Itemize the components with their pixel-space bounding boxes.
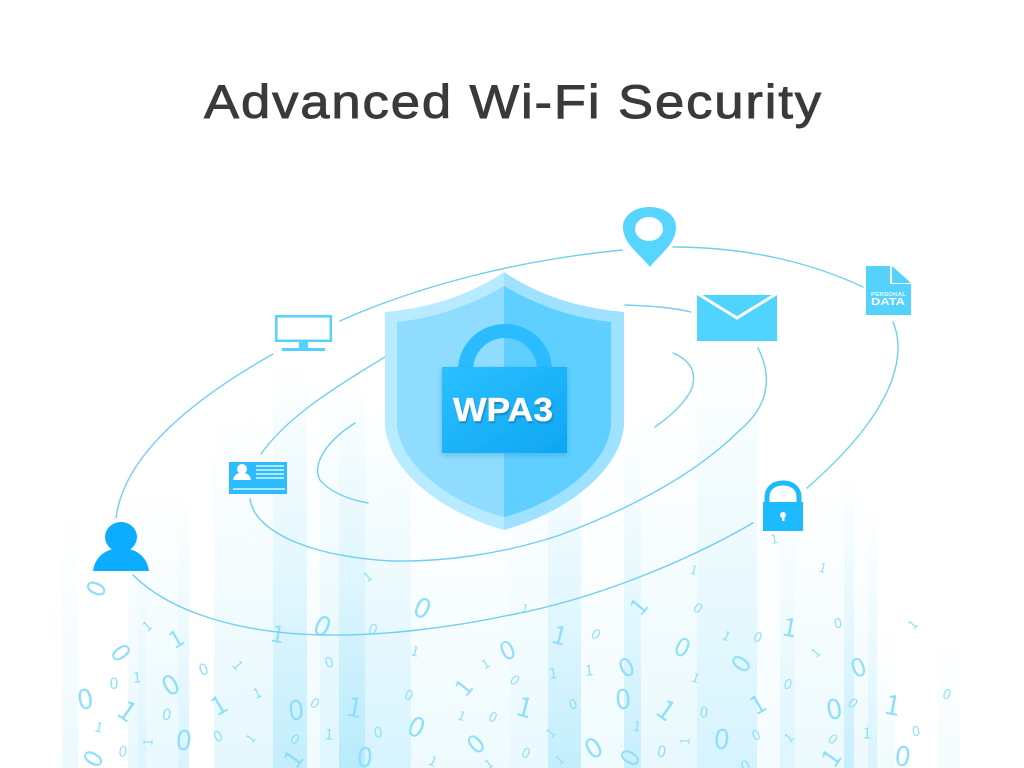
binary digits: 1 — [863, 722, 871, 744]
binary digits: 1 — [541, 723, 559, 741]
binary digits: 0 — [587, 624, 605, 645]
binary digits: 0 — [493, 629, 521, 669]
binary digits: 1 — [689, 667, 703, 687]
icon: personal data document: PERSONAL — [871, 292, 907, 298]
binary digits: 1 — [817, 557, 829, 577]
binary digits: 0 — [669, 626, 697, 666]
icon: personal data document — [866, 266, 911, 315]
binary digits: 0 — [195, 655, 211, 681]
binary digits: 0 — [110, 670, 119, 694]
binary digits: 0 — [699, 701, 709, 723]
binary digits: 0 — [750, 626, 766, 648]
binary digits: 1 — [324, 723, 334, 745]
binary digits: 1 — [619, 589, 655, 621]
binary digits: 0 — [748, 724, 764, 746]
binary digits: 0 — [372, 721, 384, 743]
binary digits: 0 — [612, 646, 640, 686]
icon: ID card — [229, 462, 287, 494]
binary digits: 0 — [506, 670, 525, 690]
icon: small padlock — [763, 483, 803, 531]
binary digits: 1 — [202, 684, 234, 724]
binary digits: 0 — [402, 684, 416, 706]
binary digits: 0 — [910, 720, 922, 742]
binary digits: 1 — [132, 666, 142, 688]
binary digits: 1 — [268, 614, 288, 650]
binary digits: 0 — [823, 687, 845, 729]
binary digits: 0 — [321, 651, 337, 673]
binary digits: 1 — [512, 685, 538, 727]
binary digits: 1 — [160, 619, 190, 655]
binary digits: 0 — [824, 729, 843, 749]
background light stripes — [62, 340, 960, 768]
binary digits: 0 — [175, 718, 193, 760]
binary digits: 0 — [103, 635, 141, 669]
binary digits: 1 — [584, 659, 594, 681]
binary digits: 1 — [769, 528, 779, 548]
binary digits: 1 — [93, 716, 105, 738]
binary digits: 0 — [614, 677, 632, 719]
binary digits: 1 — [359, 566, 375, 586]
icon: location pin — [623, 207, 676, 267]
binary digits: 1 — [520, 599, 530, 617]
icon: envelope — [697, 294, 777, 341]
binary digits: 1 — [240, 729, 260, 747]
binary digits: 0 — [832, 612, 844, 634]
binary digits: 0 — [402, 705, 432, 747]
binary digits: 1 — [138, 616, 156, 636]
binary digits: 0 — [940, 683, 954, 705]
binary digits: 0 — [713, 717, 731, 759]
binary digits: 1 — [631, 715, 643, 737]
binary digits: 0 — [656, 737, 669, 763]
binary digits: 1 — [649, 688, 685, 730]
icon: personal data document: DATA — [871, 296, 906, 308]
binary digits: 0 — [117, 740, 129, 762]
binary digits: 0 — [287, 688, 305, 730]
binary digits: 1 — [137, 738, 157, 746]
shield with WPA3 padlock — [385, 272, 624, 530]
binary digits: 1 — [688, 559, 700, 579]
binary digits: 0 — [286, 729, 304, 750]
binary digits: 1 — [344, 685, 366, 727]
binary digits: 0 — [75, 574, 115, 602]
binary digits: 1 — [902, 615, 922, 633]
binary digits: 0 — [844, 693, 863, 713]
binary digits: 0 — [485, 706, 501, 728]
binary digits: 1 — [444, 670, 480, 702]
binary digits: 1 — [720, 625, 734, 645]
padlock body — [442, 367, 567, 453]
binary digits: 1 — [741, 683, 773, 723]
orbit lines — [116, 247, 898, 635]
binary digits: 0 — [689, 598, 707, 619]
binary digits: 0 — [408, 586, 438, 628]
binary digits: 0 — [781, 673, 795, 695]
binary digits: 0 — [845, 646, 871, 686]
binary digits: 0 — [567, 693, 580, 715]
binary digits: 1 — [477, 653, 493, 673]
binary digits: 1 — [228, 656, 248, 674]
binary digits: 0 — [458, 724, 492, 762]
padlock shackle — [458, 324, 552, 370]
binary digits: 1 — [409, 640, 421, 662]
title: Advanced Wi-Fi Security — [204, 76, 821, 128]
binary digits: 1 — [110, 689, 146, 731]
binary digits: 1 — [779, 728, 797, 746]
binary digits: 1 — [674, 737, 694, 745]
binary digits: 0 — [161, 700, 174, 726]
binary digits — [72, 528, 954, 768]
binary digits: 1 — [548, 662, 558, 684]
icon: person — [93, 522, 149, 571]
binary digits: 0 — [308, 604, 338, 646]
binary digits: 1 — [806, 643, 824, 661]
binary digits: 1 — [780, 607, 800, 645]
binary digits: 1 — [455, 705, 469, 725]
binary digits: 0 — [210, 725, 226, 747]
binary digits: 1 — [249, 682, 265, 704]
binary digits: 1 — [882, 683, 904, 725]
binary digits: 0 — [153, 663, 187, 705]
binary digits: 0 — [365, 618, 381, 640]
binary digits: 0 — [721, 646, 759, 680]
binary digits: 0 — [306, 693, 324, 714]
binary digits: 1 — [548, 614, 572, 654]
binary digits: 0 — [74, 677, 96, 719]
icon: monitor — [276, 316, 331, 351]
binary digits: 0 — [576, 726, 610, 768]
WPA3 label: WPA3 — [453, 391, 553, 428]
binary digits: 0 — [518, 742, 534, 764]
